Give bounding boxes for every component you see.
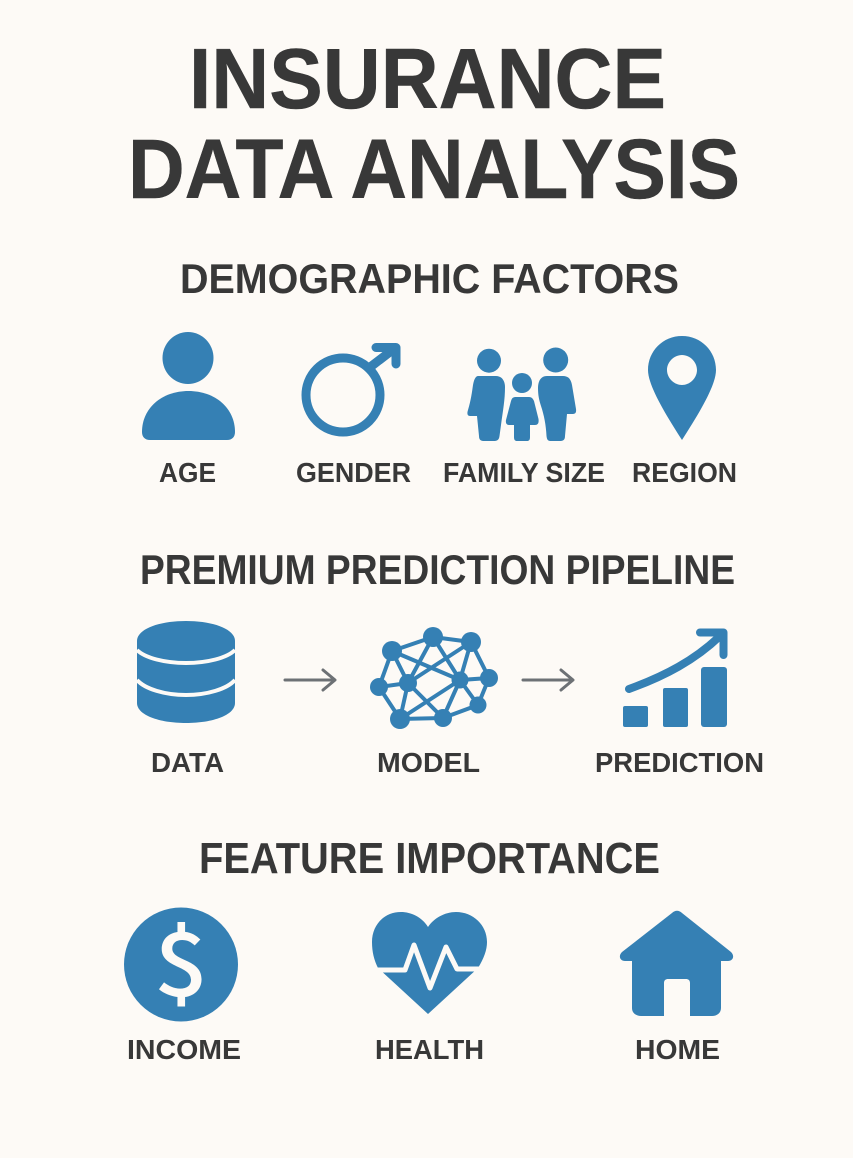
label: home: HOME: [635, 1034, 720, 1065]
title: DATA ANALYSIS: [128, 122, 740, 216]
arrow: model to prediction: [523, 670, 573, 690]
label: gender: GENDER: [296, 457, 411, 488]
heading: premium prediction pipeline: PREMIUM PREDICTION PIPELINE: [140, 546, 735, 593]
icon: growth chart: [623, 632, 727, 727]
arrow: data to model: [285, 670, 335, 690]
icon: gender symbol: [306, 348, 396, 432]
icon: neural network: [370, 627, 498, 729]
icon: database: [137, 621, 235, 723]
icon: income coin: $: [154, 895, 208, 1022]
label: health: HEALTH: [375, 1034, 484, 1065]
icon: income coin: [124, 895, 238, 1022]
label: income: INCOME: [127, 1034, 241, 1065]
heading: demographic factors: DEMOGRAPHIC FACTORS: [180, 255, 679, 302]
panel: demographic factors: [142, 255, 737, 488]
icon: heart with pulse: [368, 912, 492, 1014]
label: family size: FAMILY SIZE: [443, 457, 605, 488]
label: data: DATA: [151, 747, 224, 778]
icon: house: [620, 911, 733, 1016]
title: [128, 32, 740, 216]
label: region: REGION: [632, 457, 737, 488]
panel: feature importance: [124, 834, 733, 1065]
heading: feature importance: FEATURE IMPORTANCE: [199, 834, 660, 883]
label: model: MODEL: [377, 747, 480, 778]
label: age: AGE: [159, 457, 216, 488]
icon: person: [142, 332, 235, 440]
icon: map pin: [648, 336, 716, 440]
icon: family: [467, 348, 576, 441]
panel: premium prediction pipeline: [137, 546, 764, 778]
label: prediction: PREDICTION: [595, 747, 764, 778]
title: INSURANCE: [189, 32, 666, 127]
